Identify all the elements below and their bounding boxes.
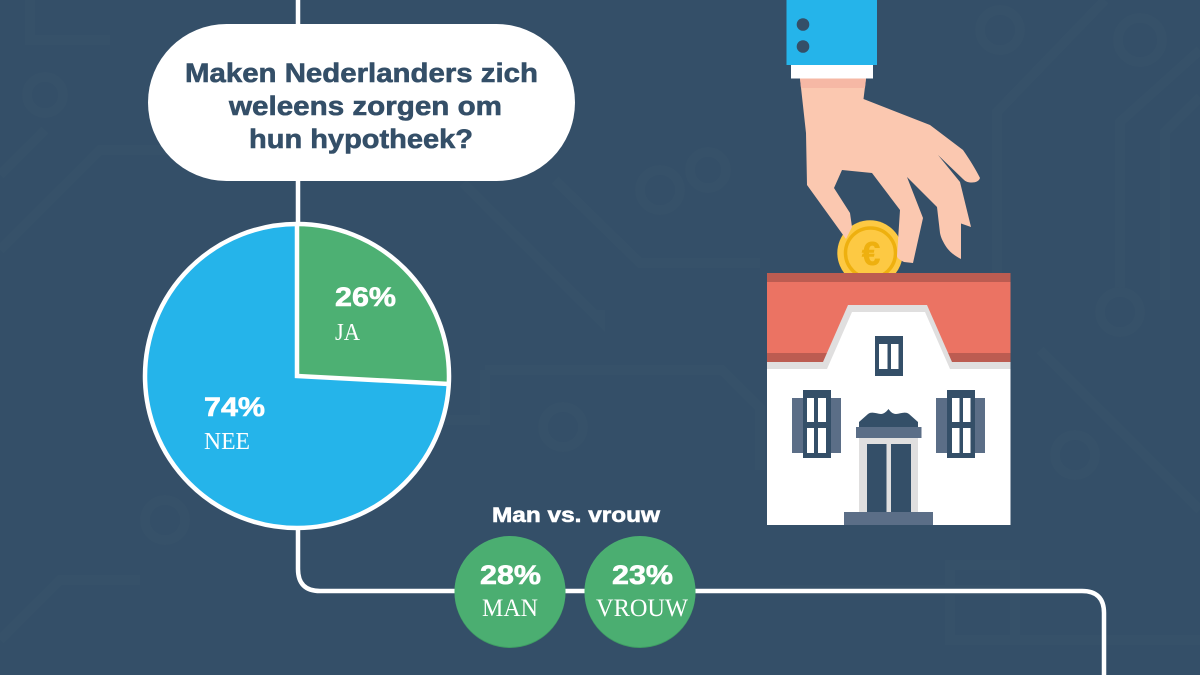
label: 74% nee: NEE xyxy=(204,429,250,455)
slice: nee 74% xyxy=(145,224,449,528)
question bubble xyxy=(148,24,575,181)
slice: ja 26% xyxy=(297,224,449,386)
connector line xyxy=(298,0,1104,675)
label: 74% nee: 74% xyxy=(204,392,265,422)
roof xyxy=(767,273,1010,362)
label: 26% ja xyxy=(335,282,396,346)
front door xyxy=(844,409,933,525)
badge: man 28%: MAN xyxy=(482,595,538,622)
cuff buttons xyxy=(797,18,809,53)
heading: hun hypotheek? xyxy=(249,124,473,154)
roof top band xyxy=(767,273,1010,282)
label: 26% ja: 26% xyxy=(335,282,396,312)
heading: Maken Nederlanders zich xyxy=(185,58,538,88)
wrist shadow xyxy=(800,78,866,88)
hand xyxy=(800,78,980,263)
pie chart: 26% ja, 74% nee xyxy=(145,224,449,528)
dormer window xyxy=(875,336,903,376)
roof gutter xyxy=(767,362,1010,369)
icon: euro coin: € xyxy=(862,235,880,272)
left window xyxy=(792,390,841,458)
subheading: man vs vrouw: Man vs. vrouw xyxy=(492,504,661,527)
badge: vrouw 23% xyxy=(584,536,696,648)
shirt cuff xyxy=(791,65,873,78)
badge: vrouw 23%: 23% xyxy=(612,560,673,590)
roof bottom band xyxy=(767,353,1010,362)
house body xyxy=(767,362,1010,525)
dormer xyxy=(823,305,952,369)
label: 74% nee xyxy=(204,392,265,455)
badge: vrouw 23%: VROUW xyxy=(596,595,688,622)
heading: weleens zorgen om xyxy=(228,91,502,121)
icon: hand dropping coin xyxy=(786,0,980,263)
sleeve cuff xyxy=(786,0,877,65)
badge: man 28% xyxy=(454,536,566,648)
badge: man 28%: 28% xyxy=(480,560,541,590)
icon: euro coin xyxy=(837,220,902,273)
label: 26% ja: JA xyxy=(335,320,361,346)
right window xyxy=(936,390,985,458)
pie outline xyxy=(145,224,449,528)
icon: house with coin slot roof xyxy=(767,273,1010,525)
